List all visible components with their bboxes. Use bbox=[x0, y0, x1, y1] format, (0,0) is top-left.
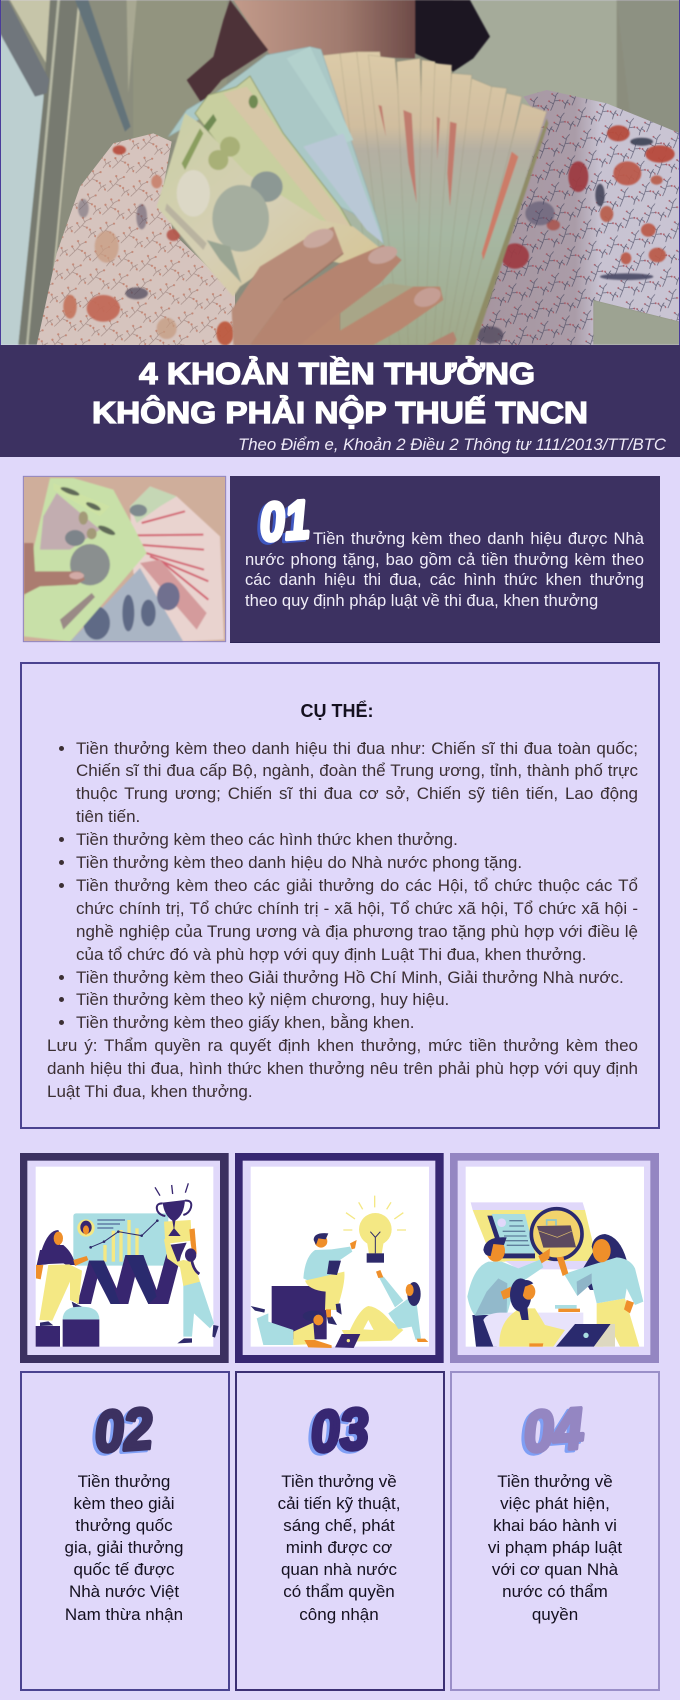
text 04: nước có thẩm bbox=[502, 1582, 608, 1601]
list and note text: Luật Thi đua, khen thưởng. bbox=[47, 1082, 253, 1101]
text 04 bbox=[488, 1472, 622, 1624]
list and note text: Tiền thưởng kèm theo giấy khen, bằng khen. bbox=[76, 1013, 414, 1032]
text 04: quyền bbox=[532, 1605, 578, 1624]
subtitle: Theo Điểm e, Khoản 2 Điều 2 Thông tư 111/2013/TT/BTC bbox=[238, 435, 667, 454]
text 03: sáng chế, phát bbox=[283, 1516, 395, 1535]
list and note text: thuộc Trung ương; Chiến sĩ thi đua cơ sở, Chiến sỹ tiên tiến, Lao động bbox=[76, 784, 638, 803]
list and note text: Chiến sĩ thi đua cấp Bộ, ngành, đoàn thể Trung ương, tỉnh, thành phố trực bbox=[76, 761, 638, 780]
text 03 bbox=[278, 1472, 400, 1624]
list and note text: Tiền thưởng kèm theo các hình thức khen thưởng. bbox=[76, 830, 458, 849]
woman lifting trophy bbox=[164, 1228, 219, 1343]
title: KHÔNG PHẢI NỘP THUẾ TNCN bbox=[92, 394, 588, 430]
illustration frame: briefcase team bbox=[450, 1153, 659, 1363]
list and note text: Tiền thưởng kèm theo Giải thưởng Hồ Chí Minh, Giải thưởng Nhà nước. bbox=[76, 968, 624, 987]
list and note text: chức chính trị, Tổ chức chính trị - xã hội, Tổ chức xã hội, Tổ chức xã hội - bbox=[76, 899, 638, 918]
panel: cụ thể bbox=[20, 662, 660, 1129]
illustration frame: light bulb idea bbox=[235, 1153, 444, 1363]
text 04: vi phạm pháp luật bbox=[488, 1538, 622, 1557]
list and note text: Tiền thưởng kèm theo danh hiệu do Nhà nước phong tặng. bbox=[76, 853, 522, 872]
photo: hand holding banknotes bbox=[22, 476, 226, 642]
text 01: nước phong tặng, bao gồm cả tiền thưởng kèm theo bbox=[245, 550, 644, 569]
light bulb bbox=[343, 1196, 406, 1263]
woman gesturing bbox=[557, 1234, 643, 1347]
title: 4 KHOẢN TIỀN THƯỞNG bbox=[139, 355, 535, 391]
hand holding the notes bbox=[232, 225, 457, 345]
title band bbox=[0, 345, 680, 457]
list and note text: nghề nghiệp của Trung ương và địa phương trao tặng phù hợp với điều lệ bbox=[76, 922, 638, 941]
text 02: kèm theo giải bbox=[73, 1494, 175, 1513]
magnifier with briefcase bbox=[531, 1209, 582, 1259]
text 01: theo quy định pháp luật về thi đua, khen thưởng bbox=[245, 591, 598, 610]
text 03: Tiền thưởng về bbox=[281, 1472, 397, 1491]
text 03: công nhận bbox=[299, 1605, 379, 1624]
text 03: minh được cơ bbox=[286, 1538, 392, 1557]
illustration frame: trophy team bbox=[20, 1153, 229, 1363]
text 01: các danh hiệu thi đua, các hình thức khen thưởng bbox=[245, 570, 644, 589]
dark box bbox=[272, 1286, 327, 1339]
text 04: việc phát hiện, bbox=[500, 1494, 610, 1513]
wall and window background bbox=[0, 0, 680, 345]
list and note text: Tiền thưởng kèm theo kỷ niệm chương, huy hiệu. bbox=[76, 990, 449, 1009]
list and note text: danh hiệu thi đua, hình thức khen thưởng nêu trên phải phù hợp với quy định bbox=[47, 1059, 638, 1078]
text 02: gia, giải thưởng bbox=[65, 1538, 183, 1557]
text 01 bbox=[245, 529, 644, 610]
list and note text: Tiền thưởng kèm theo các giải thưởng do các Hội, tổ chức thuộc các Tổ bbox=[76, 876, 638, 895]
floral blouse bbox=[37, 90, 680, 345]
desk with laptop and seated woman bbox=[483, 1278, 615, 1347]
list and note text bbox=[47, 738, 638, 1101]
text 04: khai báo hành vi bbox=[493, 1516, 617, 1535]
hero photo: woman holding a fan of banknotes bbox=[0, 0, 680, 345]
text 03: quan nhà nước bbox=[281, 1560, 397, 1579]
list and note text: của tổ chức đó và phù hợp với quy định Luật Thi đua, khen thưởng. bbox=[76, 945, 586, 964]
man pointing bbox=[467, 1237, 550, 1347]
list and note text: tiên tiến. bbox=[76, 807, 140, 826]
list and note text: Lưu ý: Thẩm quyền ra quyết định khen thưởng, mức tiền thưởng kèm theo bbox=[47, 1036, 638, 1055]
hair and neck bbox=[187, 0, 490, 103]
text 02: thưởng quốc bbox=[75, 1516, 173, 1535]
podium blocks bbox=[36, 1307, 99, 1347]
person lying with laptop bbox=[251, 1306, 360, 1348]
chart board bbox=[73, 1213, 168, 1266]
woman climbing bbox=[36, 1230, 88, 1326]
text 03: có thẩm quyền bbox=[283, 1582, 395, 1601]
list and note text: Tiền thưởng kèm theo danh hiệu thi đua như: Chiến sĩ thi đua toàn quốc; bbox=[76, 738, 638, 758]
text 01: Tiền thưởng kèm theo danh hiệu được Nhà bbox=[313, 529, 644, 548]
woman sitting on floor bbox=[342, 1270, 428, 1342]
text 04: Tiền thưởng về bbox=[497, 1472, 613, 1491]
growth W shape bbox=[77, 1247, 183, 1304]
text 02: Nhà nước Việt bbox=[69, 1582, 179, 1601]
card 03 bbox=[235, 1371, 445, 1691]
card 04 bbox=[450, 1371, 660, 1691]
banknote fan bbox=[157, 47, 548, 345]
trophy bbox=[155, 1183, 192, 1265]
man sitting with tablet bbox=[303, 1233, 357, 1325]
text 02: Tiền thưởng bbox=[78, 1472, 170, 1491]
text 02: Nam thừa nhận bbox=[65, 1605, 183, 1624]
panel 01 bbox=[230, 476, 660, 643]
heading: cụ thể: CỤ THỂ: bbox=[300, 701, 374, 721]
text 03: cải tiến kỹ thuật, bbox=[278, 1494, 400, 1513]
browser window bbox=[471, 1202, 597, 1269]
text 02: quốc tế được bbox=[74, 1560, 174, 1579]
text 04: với cơ quan Nhà bbox=[492, 1560, 618, 1579]
text 02 bbox=[65, 1472, 183, 1624]
title bbox=[92, 355, 588, 430]
card 02 bbox=[20, 1371, 230, 1691]
